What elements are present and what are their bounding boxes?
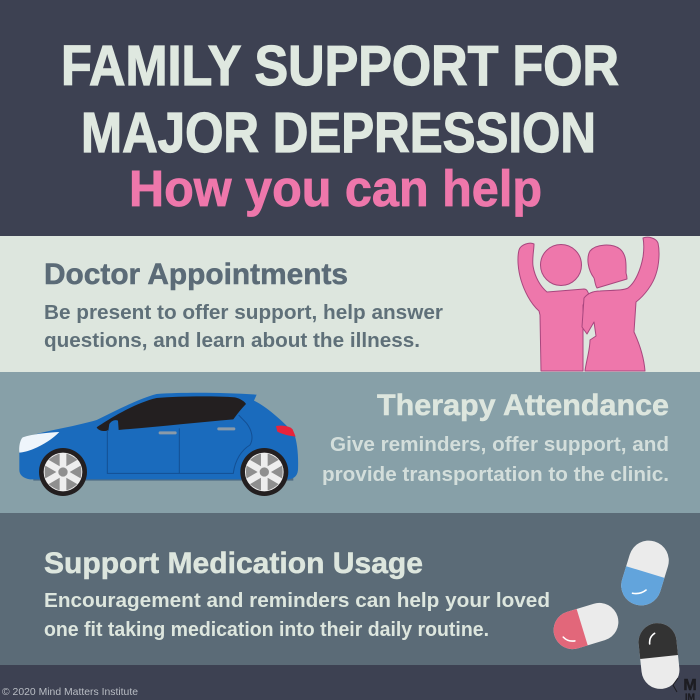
heading: therapy attendance: Therapy Attendance [377, 389, 669, 422]
panel: doctor appointments background [0, 236, 700, 372]
icon: black capsule [637, 621, 681, 691]
title: FAMILY SUPPORT FOR [61, 34, 619, 98]
rear wheel [240, 448, 288, 496]
text: medication body: Encouragement and reminders can help your loved [44, 590, 550, 612]
heading: doctor appointments: Doctor Appointments [44, 258, 348, 291]
text: medication body [44, 590, 550, 641]
icon: two people embracing [518, 237, 659, 371]
text: therapy attendance body: provide transportation to the clinic. [322, 464, 669, 486]
footer copyright: © 2020 Mind Matters Institute [2, 686, 138, 698]
car windows [97, 396, 246, 431]
car body [19, 393, 298, 479]
car shadow [33, 477, 293, 481]
text: doctor appointments body: Be present to offer support, help answer [44, 302, 443, 324]
panel: header background [0, 0, 700, 236]
car doors [107, 415, 252, 473]
front wheel [39, 448, 87, 496]
subtitle: How you can help [129, 160, 542, 217]
text: medication body: one fit taking medication into their daily routine. [44, 619, 489, 641]
heading: support medication usage: Support Medication Usage [44, 547, 423, 580]
logo: Mind Matters Institute: M [683, 677, 697, 694]
text: doctor appointments body: questions, and learn about the illness. [44, 330, 420, 352]
text: therapy attendance body [322, 434, 669, 486]
icon: red capsule [549, 598, 623, 654]
headlight [19, 432, 59, 453]
panel: footer background [0, 665, 700, 700]
panel: medication background [0, 513, 700, 665]
title: MAJOR DEPRESSION [81, 101, 596, 165]
door handles [159, 431, 177, 434]
logo: Mind Matters Institute [673, 677, 697, 700]
tail light [276, 426, 296, 437]
text: therapy attendance body: Give reminders, offer support, and [330, 434, 669, 456]
title [61, 34, 619, 165]
text: doctor appointments body [44, 302, 443, 352]
icon: blue car [19, 393, 298, 496]
panel: therapy attendance background [0, 372, 700, 513]
icon: blue capsule [616, 536, 674, 610]
